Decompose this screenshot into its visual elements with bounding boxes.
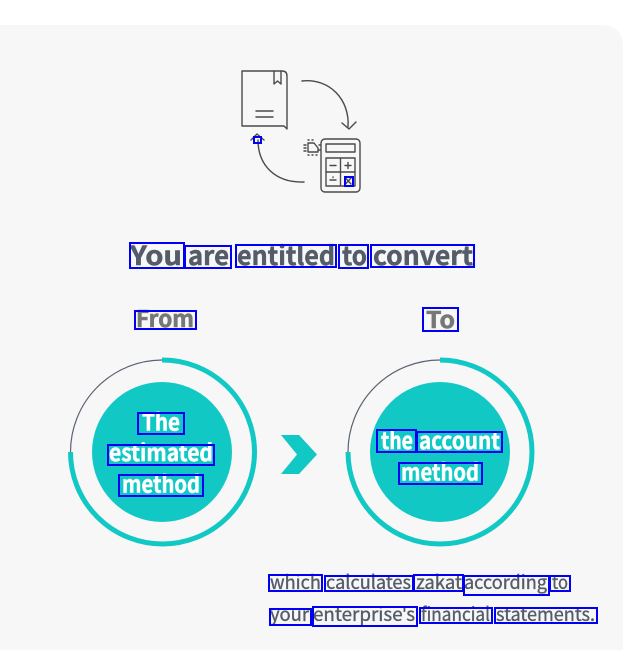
panel: account method circle [348,360,532,544]
heading [129,236,473,273]
text block: explanation: zakat [416,568,462,595]
text block: explanation: financial [421,600,490,627]
heading: entitled [237,236,335,273]
icon: small document [304,140,320,155]
text block: explanation: which [270,568,321,595]
arrow: calculator to book [251,134,304,182]
heading: convert [373,236,473,273]
text block: explanation: enterprise's [313,600,415,627]
icon: calculator [321,139,360,192]
text block: explanation [270,568,595,627]
arrow: book to calculator [302,81,356,129]
word outline boxes [108,137,597,626]
label: from: From [136,300,194,334]
panel: estimated method circle: method [122,466,200,500]
heading: You [129,236,182,273]
text block: explanation: your [270,600,310,627]
panel: estimated method circle: estimated [109,434,213,468]
panel: account method circle: account [419,422,500,456]
panel: estimated method circle [70,360,255,544]
panel: account method circle: method [401,454,479,488]
text block: explanation: statements. [496,600,595,627]
panel: account method circle: the [381,422,413,456]
arrow: chevron [281,435,317,474]
text block: explanation: to [552,568,568,595]
panel: estimated method circle: The [142,404,180,438]
heading: are [188,236,229,273]
text block: explanation: calculates [326,568,411,595]
text block: explanation: according [464,568,547,595]
icon: book [242,71,287,129]
icon: book and calculator cycle [242,71,360,192]
heading: to [342,236,367,273]
label: to: To [426,301,455,335]
